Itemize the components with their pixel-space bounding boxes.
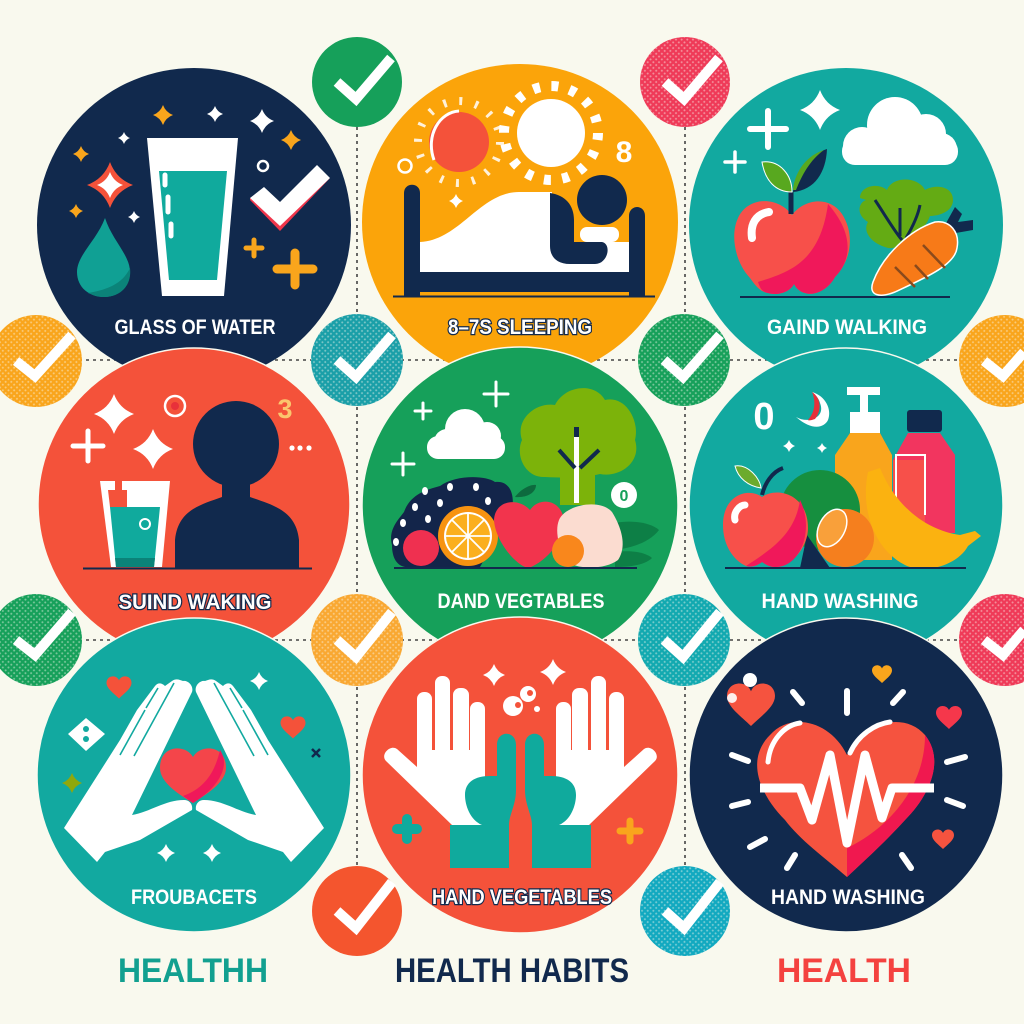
icon: pump bottle: [835, 387, 892, 560]
icon: diamond: [68, 718, 105, 751]
icon: target ring: [165, 396, 185, 416]
icon: apple: [723, 466, 808, 567]
icon: silhouette: [175, 401, 299, 568]
number 8: 8: [616, 136, 632, 169]
footer heading: right: HEALTH: [777, 952, 911, 990]
glyph: 3: [277, 394, 293, 424]
icon: apple: [494, 502, 564, 568]
icon: pulse line: [760, 755, 934, 843]
icon: check mark: [250, 165, 330, 231]
panel: fruit and vegetables: [362, 347, 678, 663]
label: SUIND WAKING: [118, 591, 272, 614]
icon: radiating ticks: [732, 691, 965, 868]
icon: heart: [160, 748, 226, 803]
panel: fruit and bottles: [689, 348, 1003, 662]
badge: green row two: [638, 314, 730, 406]
icon: white sun: [504, 86, 598, 180]
icon: leaves: [615, 522, 659, 567]
badge: red bottom: [312, 866, 402, 956]
panel: waking: [38, 348, 350, 660]
label: HAND WASHING: [771, 886, 925, 909]
icon: olive sparkle: [62, 773, 82, 793]
icon: orange slice: [438, 506, 498, 566]
icon: berries: [391, 477, 513, 567]
icon: water drop: [77, 218, 130, 297]
ground line: [740, 296, 950, 298]
icon: heart: [757, 722, 934, 877]
icon: small hearts: [106, 676, 306, 738]
icon: orange: [811, 504, 874, 567]
icon: sparkles: [69, 105, 301, 223]
icon: number zero: 0: [753, 396, 775, 438]
badge: teal row three: [638, 594, 730, 686]
icon: plus signs: [397, 819, 640, 841]
icon: plus signs: [246, 240, 313, 285]
footer heading: left: HEALTHH: [118, 952, 268, 990]
icon: cloud: [427, 409, 505, 459]
footer heading: center: HEALTH HABITS: [395, 952, 629, 990]
icon: moon: [796, 392, 829, 427]
panel: hands: [362, 617, 678, 933]
icon: number badge: [611, 482, 637, 508]
icon: apple leaf: [515, 485, 536, 497]
ellipsis dots: [289, 445, 312, 451]
icon: sparkles: [73, 394, 173, 469]
ground line: [725, 567, 966, 569]
icon: white sparkles: [157, 672, 268, 862]
icon: red fruit: [403, 530, 439, 566]
label: GAIND WALKING: [767, 316, 927, 339]
panel: sleeping: [362, 64, 678, 380]
icon: diamond sparkle: [87, 162, 133, 208]
icon: rice pile: [557, 504, 623, 568]
small ring: [398, 160, 412, 172]
ground line: [83, 568, 312, 570]
badge: teal bottom: [640, 866, 730, 956]
icon: cloud: [842, 97, 958, 165]
icon: teal right hand: [525, 734, 591, 868]
badge: green top: [312, 37, 402, 127]
icon: number badge: 0: [620, 488, 629, 505]
label: DAND VEGTABLES: [438, 590, 604, 613]
icon: drinking glass: [100, 481, 170, 567]
icon: sparkles: [725, 90, 840, 172]
icon: orange piece: [552, 535, 584, 567]
icon: apple: [734, 149, 850, 294]
icon: left white hand: [384, 676, 485, 825]
badge: pink top: [640, 37, 730, 127]
panel: heart rate: [689, 618, 1003, 932]
icon: bubbles: [503, 686, 540, 716]
badge: yellow left: [0, 315, 82, 407]
badge: yellow right: [959, 315, 1024, 407]
label: GLASS OF WATER: [114, 316, 276, 339]
dark shadow: [800, 535, 830, 568]
icon: teal left hand: [450, 734, 516, 868]
icon: green fruit: [780, 470, 860, 550]
icon: greens: [860, 180, 953, 248]
icon: carrot: [872, 207, 973, 295]
panel: hands with heart: [37, 618, 351, 932]
icon: right hand: [196, 679, 324, 862]
icon: sparkles: [783, 440, 827, 453]
icon: sparkles: [483, 659, 566, 686]
icon: banana: [866, 468, 981, 569]
icon: small x: [312, 749, 320, 757]
badge: green left: [0, 594, 82, 686]
label: HAND WASHING: [762, 590, 918, 613]
badge: teal row two: [311, 314, 403, 406]
icon: red sun: [418, 101, 500, 183]
small sparkle: [449, 194, 463, 208]
label: FROUBACETS: [131, 886, 257, 909]
icon: bed with sleeper: [393, 175, 655, 298]
icon: red bottle: [893, 410, 955, 533]
badge: pink right: [959, 594, 1024, 686]
badge: orange row three: [311, 594, 403, 686]
label: HAND VEGETABLES: [432, 886, 612, 909]
icon: plus signs: [392, 382, 508, 475]
icon: left hand: [64, 679, 192, 862]
icon: glass of water: [147, 138, 238, 296]
panel: glass of water: [37, 68, 351, 382]
panel: apple and carrot: [689, 68, 1003, 382]
icon: right white hand: [556, 676, 657, 825]
ground line: [394, 567, 637, 569]
icon: tree: [520, 388, 636, 505]
label: 8–7S SLEEPING: [448, 316, 592, 339]
icon: small hearts: [727, 665, 962, 849]
